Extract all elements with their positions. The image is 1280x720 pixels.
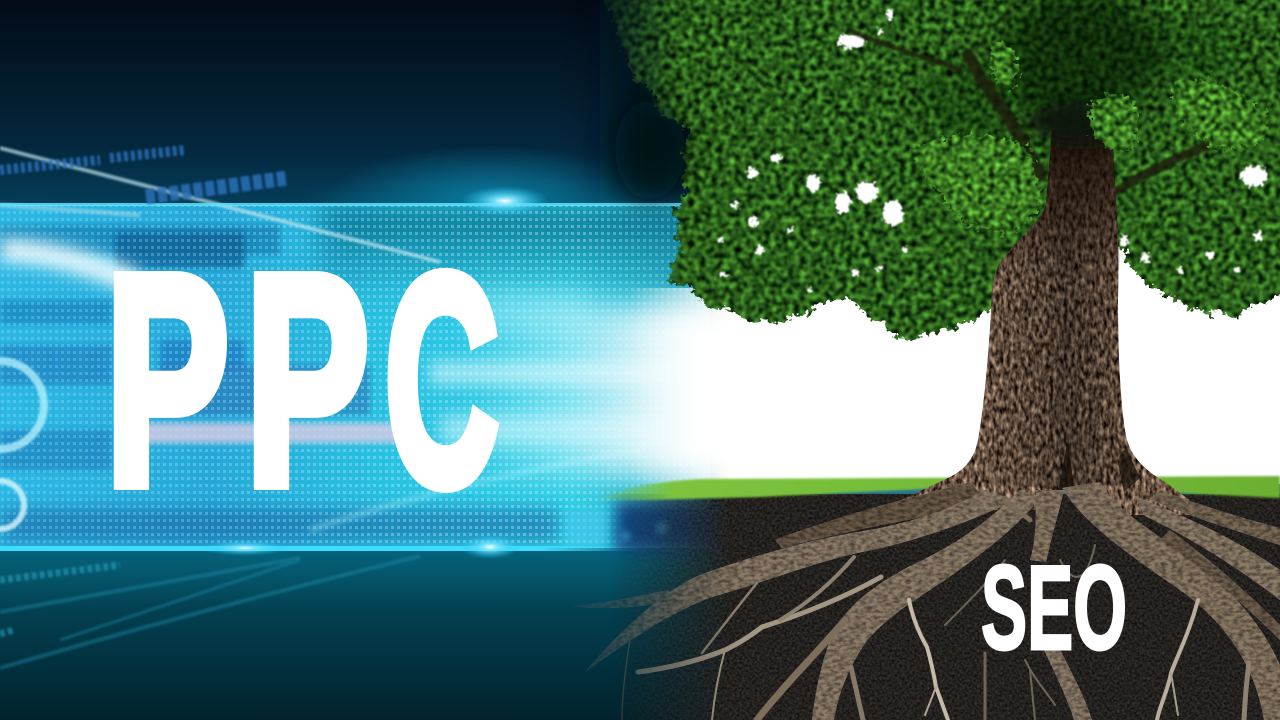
heading: SEO: SEO [981, 541, 1127, 675]
root: outer right [1150, 490, 1280, 545]
root: centre [1030, 490, 1064, 562]
background glow above the panel [320, 145, 660, 265]
root: main left [585, 490, 1015, 672]
root: centre lower [1044, 645, 1092, 720]
ground: dark soil [560, 494, 1280, 720]
tree trunk [880, 100, 1210, 515]
branches [850, 30, 1240, 190]
garbled digital text: upper left [0, 150, 288, 197]
root: far right strand [1160, 530, 1280, 640]
leaf clusters overlapping upper trunk [908, 41, 1270, 235]
garbled digital text: lower left [0, 565, 120, 634]
sky: soft left edge below the canopy [630, 288, 1280, 484]
canopy: shaded core and left edge [615, 0, 1250, 200]
glowing flare: top [461, 186, 549, 216]
heading: PPC [106, 213, 499, 547]
root: second left thick [812, 490, 1040, 720]
faint blue data blocks at panel end [566, 510, 668, 544]
sky behind canopy [730, 0, 1280, 290]
glowing flare: bottom [201, 535, 520, 559]
root: main right [1062, 482, 1280, 720]
panel: digital blue data band [0, 148, 720, 551]
ground: green grass strip [590, 476, 1280, 500]
tree roots [572, 482, 1280, 720]
light streaks below the panel [0, 556, 420, 668]
root: upper left strand [775, 482, 990, 548]
root: far left branch [572, 590, 676, 608]
deep-blue panel end under the grass [615, 502, 740, 552]
tree canopy [596, 0, 1280, 342]
backdrop: white sky fading in from the left [470, 305, 1280, 477]
root: upper right [1135, 496, 1280, 600]
gaps in canopy showing the sky [717, 9, 1268, 293]
letter C: C [385, 213, 499, 547]
letters P and P: PP [106, 214, 369, 547]
background: dark region behind canopy edge [620, 0, 780, 205]
thin rootlets [622, 500, 1249, 720]
